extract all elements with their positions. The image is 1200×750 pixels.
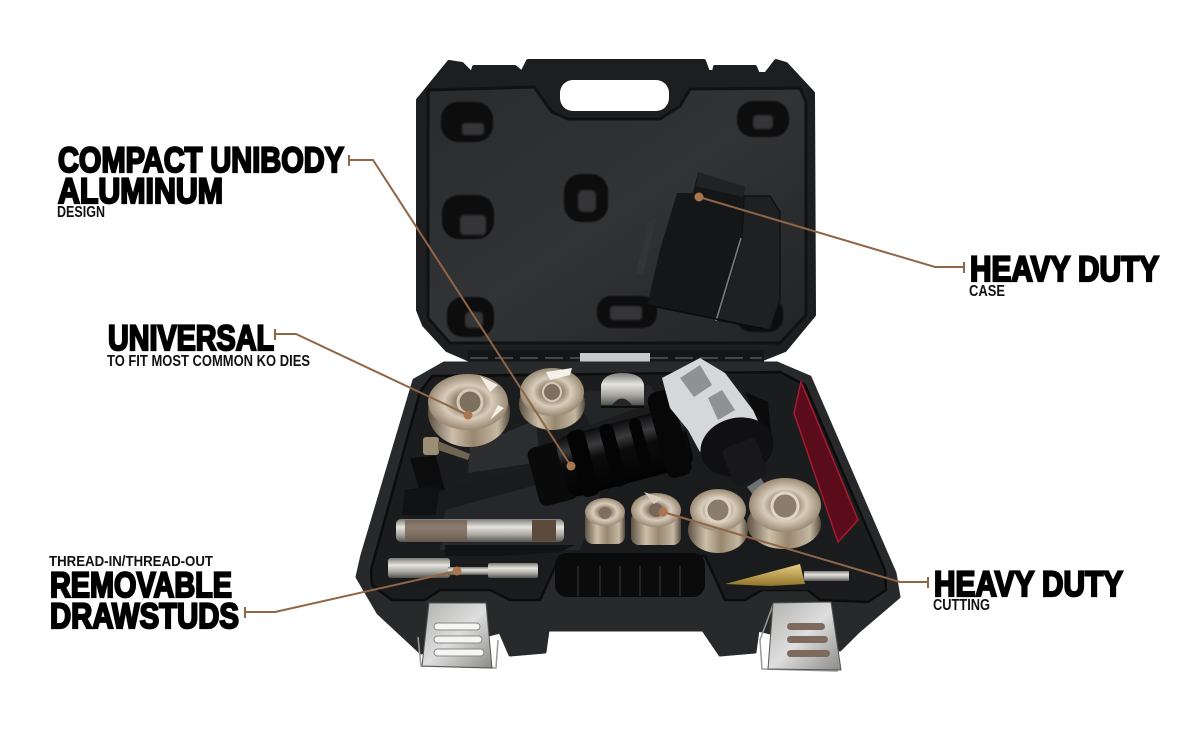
- leader: cutting: [658, 508, 928, 588]
- foam pockets: [410, 456, 445, 492]
- label: heavy duty case: CASE: [969, 283, 1005, 300]
- leader: universal: [275, 329, 472, 420]
- label: compact unibody aluminum design: DESIGN: [57, 204, 105, 221]
- label: compact unibody aluminum design: [57, 141, 344, 221]
- die two: [631, 492, 681, 545]
- leader: compact unibody: [349, 155, 576, 470]
- label: universal: TO FIT MOST COMMON KO DIES: [107, 353, 310, 370]
- label: removable drawstuds: DRAWSTUDS: [50, 597, 239, 636]
- right latch: [760, 602, 841, 671]
- red plate: [794, 382, 858, 542]
- cast aluminium body: [662, 358, 780, 504]
- die four: [747, 478, 821, 549]
- long drawstud: [396, 519, 564, 542]
- label: heavy duty cutting: HEAVY DUTY: [934, 565, 1123, 604]
- carry handle recess: [555, 553, 705, 597]
- pump handle: [520, 387, 697, 513]
- label: heavy duty case: HEAVY DUTY: [970, 250, 1159, 289]
- case base: [357, 363, 899, 655]
- label: heavy duty cutting: CUTTING: [933, 597, 990, 614]
- handle opening: [560, 80, 669, 111]
- label: heavy duty cutting: [933, 565, 1123, 614]
- black flange: [694, 409, 780, 485]
- left latch: [418, 603, 498, 668]
- medium knockout die: [519, 368, 585, 430]
- label: removable drawstuds: THREAD-IN/THREAD-OUT: [49, 553, 213, 570]
- label: compact unibody aluminum design: ALUMINUM: [58, 172, 223, 211]
- large knockout die: [428, 374, 510, 447]
- case lid: [418, 61, 814, 365]
- lid tool pocket: [636, 172, 780, 330]
- leader: case: [694, 192, 964, 273]
- ram: [721, 437, 769, 487]
- step drill bit: [725, 564, 849, 586]
- die one: [585, 498, 625, 544]
- steel spacer block: [601, 373, 644, 407]
- label: compact unibody aluminum design: COMPACT UNIBODY: [58, 141, 344, 180]
- lower die set: [585, 478, 821, 553]
- foam lining: [400, 440, 860, 590]
- label: removable drawstuds: [49, 553, 239, 636]
- label: removable drawstuds: REMOVABLE: [50, 566, 232, 605]
- label: heavy duty case: [969, 250, 1159, 300]
- die three: [688, 489, 748, 553]
- small bolt: [423, 437, 470, 460]
- hinge: [468, 350, 764, 365]
- lid recesses: [441, 101, 789, 337]
- short drawstud: [388, 558, 538, 578]
- label: universal: UNIVERSAL: [108, 319, 274, 358]
- leader: drawstuds: [245, 566, 462, 618]
